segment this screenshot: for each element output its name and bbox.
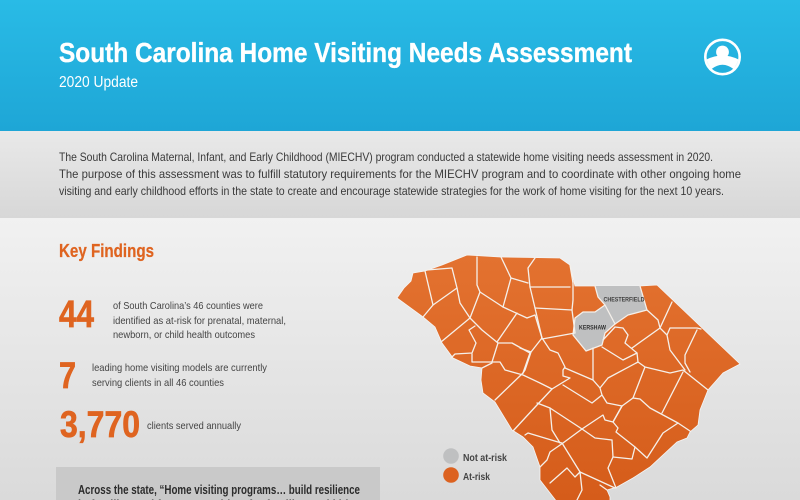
- stat: 7 models: serving clients in all 46 counties: [92, 377, 224, 389]
- legend: not at-risk: Not at-risk: [463, 452, 507, 464]
- county borders: [423, 257, 708, 500]
- stat: 7 models: [59, 355, 268, 396]
- intro text: [59, 150, 741, 198]
- legend: [443, 448, 507, 483]
- stat: 7 models: leading home visiting models are currently: [92, 362, 268, 374]
- at-risk counties: [397, 255, 740, 500]
- map label: Chesterfield: CHESTERFIELD: [604, 296, 645, 304]
- heading: key findings: Key Findings: [59, 240, 154, 261]
- stat: 44 counties: [59, 294, 286, 341]
- intro text: The purpose of this assessment was to fulfill statutory requirements for the MIECHV program and to coordinate with other ongoing home: [59, 167, 741, 181]
- stat: 44 counties: 44: [59, 294, 94, 336]
- not at-risk: Chesterfield and Kershaw: [573, 286, 647, 351]
- intro text: visiting and early childhood efforts in the state to create and encourage statewide strategies for the work of home visiting for the next 10 years.: [59, 184, 724, 198]
- icon: person in circle: [705, 40, 740, 74]
- stat: 44 counties: of South Carolina’s 46 counties were: [113, 300, 263, 312]
- intro text: The South Carolina Maternal, Infant, and Early Childhood (MIECHV) program conducted a statewide home visiting needs assessment in 2020.: [59, 150, 713, 164]
- subtitle: 2020 Update: [59, 74, 138, 91]
- legend: at-risk: At-risk: [463, 471, 490, 483]
- panel: introduction: [0, 131, 800, 218]
- stat: 7 models: 7: [59, 355, 76, 396]
- map label: Kershaw: KERSHAW: [579, 324, 606, 332]
- callout: quote: [56, 467, 380, 500]
- panel: header banner: [0, 0, 800, 131]
- stat: 44 counties: newborn, or child health outcomes: [113, 329, 255, 341]
- title: South Carolina Home Visiting Needs Assessment: [59, 37, 632, 68]
- stat: 3,770 clients: 3,770: [60, 404, 140, 445]
- callout: quote: Across the state, “Home visiting programs… build resilience: [78, 483, 360, 497]
- stat: 3,770 clients: [60, 404, 242, 445]
- panel: key findings background: [0, 218, 800, 500]
- stat: 44 counties: identified as at-risk for prenatal, maternal,: [113, 315, 286, 327]
- stat: 3,770 clients: clients served annually: [147, 420, 242, 432]
- map: South Carolina counties: [397, 255, 740, 500]
